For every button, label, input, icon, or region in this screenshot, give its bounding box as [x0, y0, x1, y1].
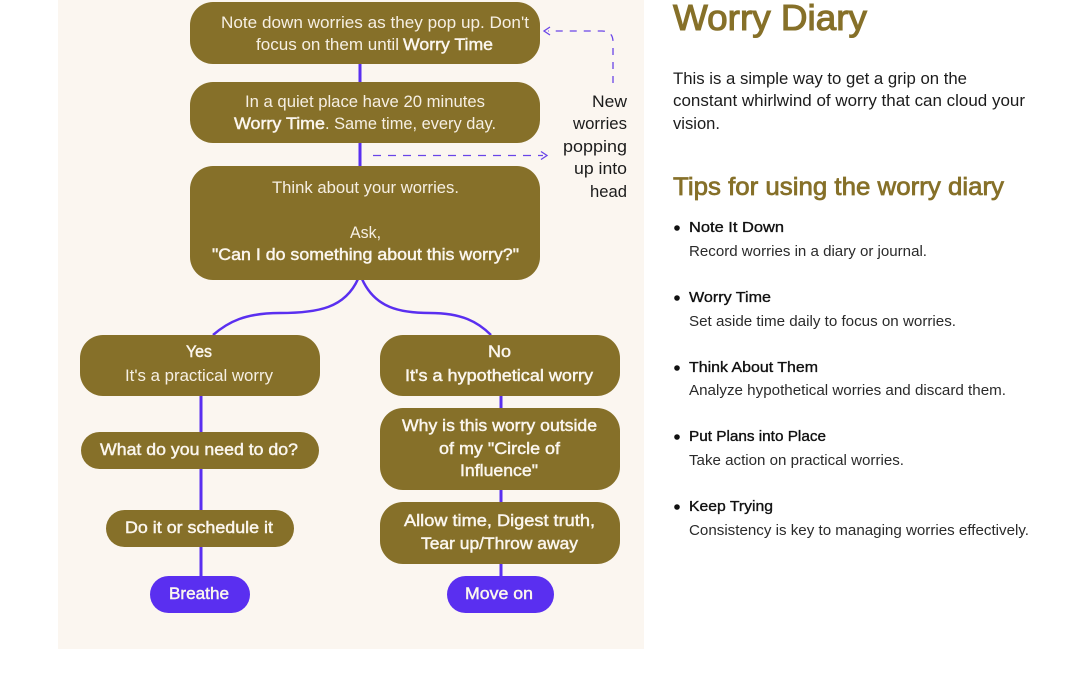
- step: allow time: Allow time, Digest truth,: [404, 512, 595, 530]
- arrow: worries popping up to the side: [373, 152, 547, 160]
- label: new worries popping up into head: [563, 93, 627, 201]
- tip: think about them: Analyze hypothetical worries and discard them.: [689, 382, 1006, 399]
- tip: keep trying: Consistency is key to managing worries effectively.: [689, 522, 1029, 539]
- tip: think about them: [674, 359, 1006, 399]
- label: new worries popping up into head: worries: [572, 115, 627, 133]
- end: move on: [447, 576, 554, 613]
- step: worry time: [190, 82, 540, 143]
- tip: worry time: Set aside time daily to focus on worries.: [689, 313, 956, 330]
- tip: worry time: [674, 289, 956, 330]
- step: circle of influence: [380, 408, 620, 490]
- intro text: vision.: [673, 115, 720, 133]
- intro text: This is a simple way to get a grip on the: [673, 70, 967, 88]
- label: new worries popping up into head: popping: [563, 138, 627, 156]
- step: what do you need to do: What do you need to do?: [100, 441, 298, 459]
- intro text: [673, 70, 1026, 133]
- step: think about worries: "Can I do something about this worry?": [212, 246, 519, 264]
- branch: yes practical worry: Yes: [186, 343, 212, 361]
- step: note down worries: Worry Time: [403, 36, 493, 54]
- step: do it or schedule it: [106, 510, 294, 547]
- step: think about worries: [190, 166, 540, 280]
- tip: note it down: Note It Down: [689, 219, 784, 236]
- tip: think about them: Think About Them: [689, 359, 818, 376]
- end: move on: Move on: [465, 585, 533, 603]
- step: circle of influence: Why is this worry outside: [402, 417, 597, 435]
- branch: yes practical worry: [80, 335, 320, 396]
- label: new worries popping up into head: up into: [574, 160, 627, 178]
- branch: yes practical worry: It's a practical worry: [125, 367, 274, 385]
- step: note down worries: Note down worries as they pop up. Don't: [221, 14, 529, 32]
- tip: keep trying: Keep Trying: [689, 498, 773, 515]
- step: think about worries: Think about your worries.: [272, 179, 459, 197]
- tip: keep trying: [674, 498, 1029, 539]
- step: allow time: Tear up/Throw away: [421, 535, 579, 553]
- end: breathe: Breathe: [169, 585, 229, 603]
- step: think about worries: Ask,: [350, 224, 381, 242]
- tip: put plans into place: Put Plans into Place: [689, 428, 826, 445]
- step: worry time: In a quiet place have 20 minutes: [245, 93, 485, 111]
- tip: worry time: Worry Time: [689, 289, 771, 306]
- heading: tips: Tips for using the worry diary: [673, 173, 1005, 201]
- step: worry time: . Same time, every day.: [325, 115, 496, 133]
- step: what do you need to do: [81, 432, 319, 469]
- tip: note it down: Record worries in a diary or journal.: [689, 243, 927, 260]
- branch: no hypothetical worry: It's a hypothetical worry: [405, 367, 594, 385]
- step: circle of influence: of my "Circle of: [439, 440, 560, 458]
- connectors: curved yes/no branches: [213, 279, 491, 335]
- tip: put plans into place: Take action on practical worries.: [689, 452, 904, 469]
- tip: put plans into place: [674, 428, 904, 469]
- arrow: new worries back to first step: [544, 27, 613, 83]
- label: new worries popping up into head: New: [592, 93, 627, 111]
- label: new worries popping up into head: head: [590, 183, 627, 201]
- step: do it or schedule it: Do it or schedule it: [125, 519, 273, 537]
- step: circle of influence: Influence": [460, 462, 538, 480]
- step: note down worries: [190, 2, 540, 64]
- intro text: constant whirlwind of worry that can cloud your: [673, 92, 1026, 110]
- step: allow time: [380, 502, 620, 564]
- panel: flowchart background: [58, 0, 644, 649]
- step: worry time: Worry Time: [234, 115, 325, 133]
- connectors: no column: [500, 394, 502, 578]
- branch: no hypothetical worry: [380, 335, 620, 396]
- branch: no hypothetical worry: No: [488, 343, 511, 361]
- tip: note it down: [674, 219, 927, 260]
- end: breathe: [150, 576, 250, 613]
- step: note down worries: focus on them until: [256, 36, 399, 54]
- connectors: top column: [358, 62, 362, 168]
- connectors: yes column: [200, 394, 202, 578]
